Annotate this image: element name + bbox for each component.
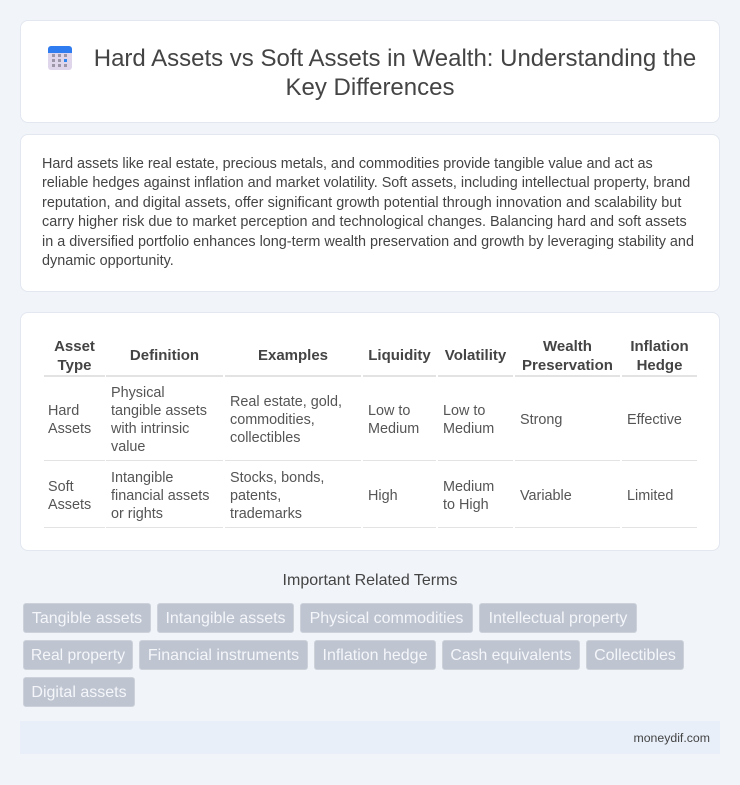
row: hard assets: commodities, <box>230 412 315 428</box>
row: soft assets: Medium <box>443 479 494 495</box>
row: soft assets: Stocks, bonds, <box>230 470 324 486</box>
row: hard assets: Low to <box>368 403 410 419</box>
table header row: Examples <box>258 347 328 364</box>
intro paragraph: dynamic opportunity. <box>42 253 174 269</box>
title: Key Differences <box>286 74 454 100</box>
icon: calendar <box>48 46 72 70</box>
row: soft assets: patents, <box>230 488 281 504</box>
related terms tags: Physical commodities <box>310 610 463 627</box>
related terms tags: Intangible assets <box>165 610 286 627</box>
row: hard assets: Hard <box>48 403 79 419</box>
row: soft assets: trademarks <box>230 506 302 522</box>
table header row: Definition <box>130 347 199 364</box>
header card <box>20 20 720 123</box>
intro text panel <box>20 134 720 292</box>
table header row: Type <box>58 357 91 374</box>
related terms tags: Intellectual property <box>489 610 627 627</box>
table header row: Preservation <box>522 357 613 374</box>
row: soft assets: or rights <box>111 506 163 522</box>
row: hard assets: Effective <box>627 412 682 428</box>
row: hard assets: Medium <box>443 421 494 437</box>
table header row: Volatility <box>445 347 506 364</box>
footer source text: moneydif.com <box>633 731 710 745</box>
row: hard assets <box>44 385 697 461</box>
table header row: Inflation <box>630 338 689 355</box>
row: hard assets: Low to <box>443 403 485 419</box>
related terms tags: Collectibles <box>594 647 676 664</box>
row: soft assets: Assets <box>48 497 91 513</box>
row: hard assets: with intrinsic <box>111 421 189 437</box>
related terms tags: Real property <box>31 647 125 664</box>
row: soft assets: financial assets <box>111 488 209 504</box>
row: hard assets: tangible assets <box>111 403 207 419</box>
row: hard assets: collectibles <box>230 430 300 446</box>
table header row: Hedge <box>637 357 682 374</box>
row: soft assets: Soft <box>48 479 74 495</box>
row: hard assets: value <box>111 439 145 455</box>
table header row: Liquidity <box>368 347 431 364</box>
intro paragraph: reputation, and digital assets, offer significant growth potential through innovation and scalability but <box>42 195 681 211</box>
related terms tags <box>23 603 684 707</box>
row: hard assets: Medium <box>368 421 419 437</box>
row: soft assets: to High <box>443 497 489 513</box>
intro paragraph <box>42 156 694 269</box>
row: hard assets: Real estate, gold, <box>230 394 342 410</box>
row: hard assets: Assets <box>48 421 91 437</box>
related terms tags: Tangible assets <box>32 610 142 627</box>
title: Hard Assets vs Soft Assets in Wealth: Understanding the <box>94 45 696 72</box>
intro paragraph: in a diversified portfolio enhances long-term wealth preservation and growth by leveraging stability and <box>42 234 694 250</box>
footer bar <box>20 721 720 754</box>
row: soft assets: Intangible <box>111 470 173 486</box>
intro paragraph: carry higher risk due to market perception and technological changes. Balancing hard and soft assets <box>42 214 687 230</box>
intro paragraph: Hard assets like real estate, precious metals, and commodities provide tangible value and act as <box>42 156 653 172</box>
row: hard assets: Strong <box>520 412 562 428</box>
row: soft assets: Limited <box>627 488 673 504</box>
related terms tags: Cash equivalents <box>450 647 572 664</box>
row: soft assets: Variable <box>520 488 572 504</box>
row: soft assets: High <box>368 488 398 504</box>
row: soft assets <box>44 470 697 528</box>
related terms tags: Financial instruments <box>148 647 299 664</box>
related terms tags: Inflation hedge <box>322 647 427 664</box>
row: hard assets: Physical <box>111 385 165 401</box>
title <box>94 45 696 100</box>
table header row <box>44 338 697 377</box>
related terms heading: Important Related Terms <box>283 572 457 589</box>
intro paragraph: reliable hedges against inflation and market volatility. Soft assets, including intellectual property, brand <box>42 175 690 191</box>
comparison table panel <box>20 312 720 551</box>
related terms tags: Digital assets <box>31 684 127 701</box>
table header row: Asset <box>54 338 95 355</box>
table header row: Wealth <box>543 338 592 355</box>
